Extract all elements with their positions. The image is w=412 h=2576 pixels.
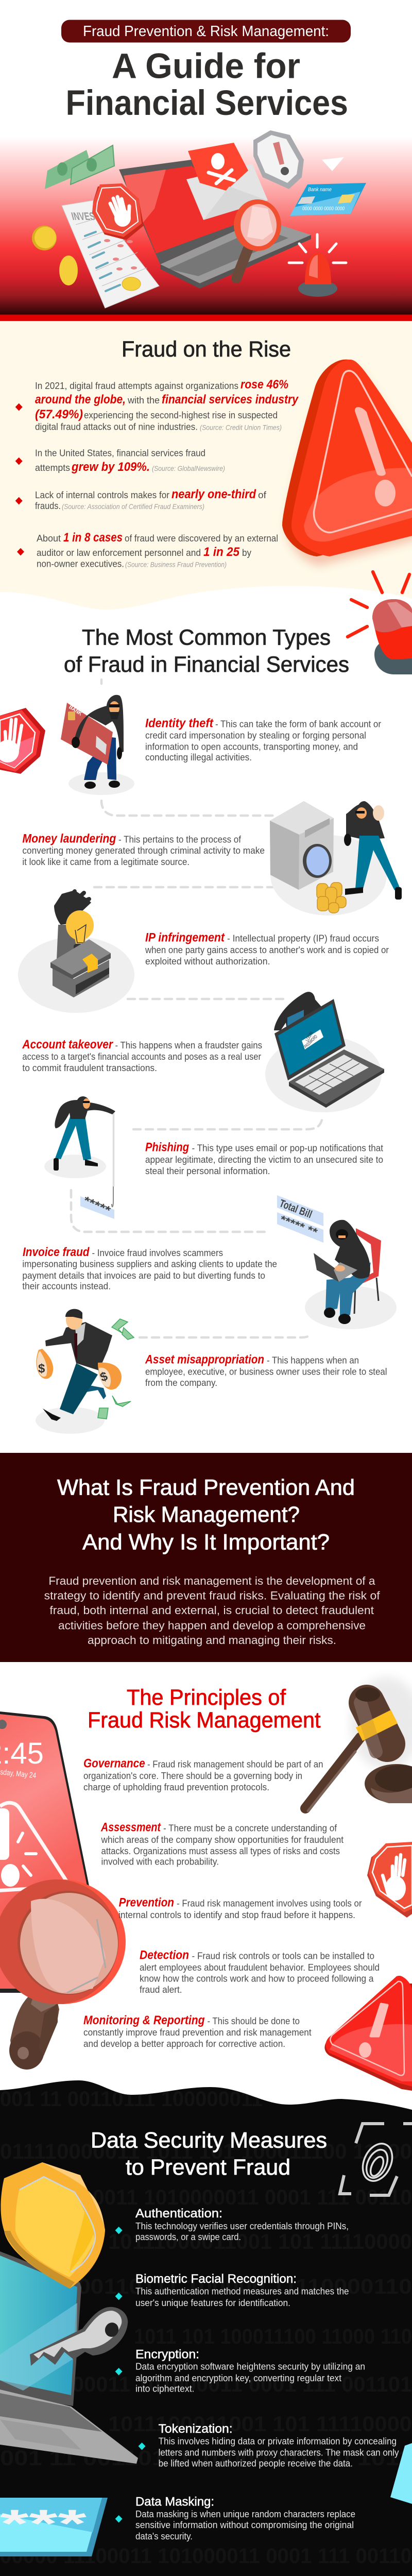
- skull and crossbones: [209, 153, 234, 183]
- body text: [44, 1574, 381, 1647]
- text: account takeover: access to a target's financial accounts and poses as a real user: [22, 1052, 261, 1062]
- icon: credit card: [290, 183, 366, 216]
- text: phishing: Phishing: [145, 1141, 189, 1155]
- text: phishing: - This type uses email or pop-up notifications that: [192, 1143, 383, 1154]
- heading: The Most Common Types: [82, 625, 331, 650]
- icon: account takeover laptop: [265, 992, 384, 1112]
- item: biometric: This authentication method measures and matches the: [135, 2286, 349, 2297]
- icon: warning triangle right: [324, 1976, 412, 2091]
- text: identity theft: information to open accounts, transporting money, and: [145, 742, 358, 752]
- icon: poison envelope: [186, 143, 268, 220]
- heading: Fraud Risk Management: [88, 1708, 321, 1733]
- text: invoice fraud: their accounts instead.: [22, 1281, 111, 1292]
- body text: activities before they happen and develop a comprehensive: [58, 1619, 366, 1632]
- bullet: digital fraud attempts: experiencing the second-highest rise in suspected: [84, 410, 278, 420]
- item: biometric: Biometric Facial Recognition:: [135, 2272, 297, 2286]
- body text: approach to mitigating and managing their risks.: [88, 1634, 336, 1647]
- text: phishing: steal their personal information.: [145, 1166, 270, 1176]
- body text: strategy to identify and prevent fraud risks. Evaluating the risk of: [44, 1589, 381, 1602]
- bullet: discovery cases: About: [37, 533, 61, 544]
- text: asset misappropriation: [145, 1353, 387, 1388]
- text: governance: organization's core. There should be a governing body in: [83, 1771, 302, 1781]
- bullet: united states growth: grew by 109%.: [71, 460, 150, 474]
- text: assessment: Assessment: [100, 1820, 161, 1834]
- heading: Risk Management?: [113, 1502, 300, 1527]
- bullet: discovery cases: 1 in 8 cases: [63, 531, 123, 545]
- icon: password card: ***: [0, 2502, 87, 2546]
- bullet: internal controls: frauds.: [35, 501, 61, 511]
- icon: account takeover laptop: LOGIN: [304, 1031, 314, 1042]
- item: data masking: Data masking is when unique random characters replace: [135, 2509, 355, 2519]
- icon: running man with money bags: $: [98, 1369, 110, 1385]
- text: monitoring and reporting: Monitoring & Reporting: [83, 2013, 205, 2027]
- item: tokenization: be lifted when authorized people receive the data.: [159, 2459, 353, 2469]
- text: prevention: [118, 1895, 362, 1920]
- text: asset misappropriation: from the company.: [145, 1378, 217, 1388]
- text: account takeover: [22, 1038, 262, 1073]
- icon: running man with money bags: $: [38, 1362, 45, 1376]
- text: asset misappropriation: - This happens when an: [267, 1355, 359, 1366]
- bullet: discovery cases: [17, 531, 278, 569]
- bullet: digital fraud attempts: (Source: Credit Union Times): [200, 423, 282, 432]
- text: ip infringement: [145, 931, 389, 967]
- bullet: digital fraud attempts: digital fraud attacks out of nine industries.: [35, 421, 198, 432]
- icon: invoice hacker on chair: Total Bill: [278, 1197, 314, 1221]
- text: money laundering: converting money generated through criminal activity to make: [22, 845, 265, 856]
- icon: paper plane: [322, 157, 344, 171]
- bullet: digital fraud attempts: In 2021, digital fraud attempts against organizations: [35, 381, 238, 391]
- bullet: digital fraud attempts: around the globe,: [35, 393, 126, 406]
- binary watermark: 011110000011 1011 101 100011100 11000: [0, 2139, 412, 2163]
- subtitle pill: Fraud Prevention & Risk Management:: [83, 23, 329, 40]
- icon: running man with money bags: [36, 1309, 134, 1434]
- item: encryption: [115, 2348, 365, 2394]
- panel: hero illustration: [0, 130, 412, 321]
- text: money laundering: Money laundering: [22, 832, 116, 846]
- item: tokenization: Tokenization:: [159, 2422, 233, 2436]
- text: detection: fraud alert.: [140, 1985, 182, 1995]
- bullet: internal controls: Lack of internal controls makes for: [35, 490, 169, 500]
- bullet: united states growth: In the United States, financial services fraud: [35, 448, 205, 458]
- item: data masking: Data Masking:: [135, 2495, 214, 2509]
- icon: hand stealing lightbulb from box: [18, 890, 134, 1013]
- text: account takeover: - This happens when a fraudster gains: [115, 1040, 262, 1050]
- bullet: discovery cases: auditor or law enforcement personnel and: [37, 548, 201, 558]
- text: governance: charge of upholding fraud prevention protocols.: [83, 1782, 269, 1792]
- text: governance: - Fraud risk management should be part of an: [147, 1759, 323, 1769]
- icon: stop sign right: [367, 1842, 412, 1918]
- text: money laundering: it look like it came from a legitimate source.: [22, 857, 190, 867]
- bullet: discovery cases: by: [242, 548, 251, 558]
- heading: The Principles of: [127, 1685, 286, 1710]
- icon: phone with alert: [0, 1711, 91, 1993]
- text: monitoring and reporting: [83, 2013, 312, 2049]
- text: prevention: Prevention: [119, 1895, 174, 1909]
- text: ip infringement: IP infringement: [145, 931, 225, 945]
- body text: Fraud prevention and risk management is the development of a: [48, 1574, 375, 1587]
- heading: [88, 1685, 321, 1733]
- text: money laundering: - This pertains to the process of: [118, 835, 242, 845]
- icon: credit card: 0000 0000 0000 0000: [302, 206, 345, 212]
- bullet: discovery cases: non-owner executives.: [37, 559, 124, 569]
- icon: banknotes: [45, 145, 114, 189]
- icon: coins: [32, 226, 78, 285]
- title: A Guide for: [112, 46, 300, 86]
- item: encryption: Encryption:: [135, 2348, 199, 2362]
- bullet: digital fraud attempts: (57.49%): [35, 408, 83, 421]
- text: invoice fraud: [22, 1245, 277, 1292]
- text: invoice fraud: Invoice fraud: [23, 1245, 90, 1259]
- icon: credit card: Bank name: [308, 187, 332, 193]
- text: prevention: internal controls to identify and stop fraud before it happens.: [118, 1910, 355, 1920]
- icon: report document: INVEST: [70, 210, 101, 223]
- icon: large magnifier: [0, 1879, 126, 2070]
- text: invoice fraud: - Invoice fraud involves scammers: [92, 1248, 223, 1258]
- heading: to Prevent Fraud: [126, 2155, 290, 2180]
- bullet: united states growth: [15, 448, 225, 474]
- item: tokenization: This involves hiding data or private information by concealing: [159, 2436, 397, 2447]
- text: detection: - Fraud risk controls or tools can be installed to: [192, 1951, 374, 1961]
- icon: red siren: [348, 572, 412, 674]
- panel: data security measures: [0, 2080, 412, 2576]
- panel: header: [61, 20, 351, 123]
- panel: principles of fraud risk management: [0, 1677, 412, 2091]
- heading: of Fraud in Financial Services: [64, 652, 349, 677]
- text: assessment: - There must be a concrete understanding of: [163, 1823, 337, 1833]
- icon: phishing thief: *****: [81, 1194, 113, 1217]
- icon: invoice hacker on chair: ***** **: [278, 1213, 319, 1239]
- icon: laptop with shield and key: [0, 2162, 138, 2464]
- text: identity theft: credit card impersonation by stealing or forging personal: [145, 731, 366, 741]
- text: phishing: [145, 1141, 383, 1176]
- text: monitoring and reporting: - This should be done to: [207, 2016, 300, 2026]
- icon: report document: [62, 200, 159, 308]
- item: authentication: This technology verifies user credentials through PINs,: [135, 2221, 349, 2231]
- panel: what is fraud prevention: [0, 1453, 412, 1662]
- icon: account takeover laptop: PASSWORD: [303, 1033, 318, 1049]
- text: ip infringement: when one party gains access to another's work and is copied or: [145, 945, 389, 955]
- heading: Fraud on the Rise: [122, 337, 291, 362]
- title: Financial Services: [66, 83, 348, 123]
- bullet: digital fraud attempts: financial services industry: [162, 393, 299, 406]
- bullet: united states growth: (Source: GlobalNewswire): [152, 464, 225, 472]
- binary watermark: 001 11 00110111 100000011: [0, 2087, 263, 2111]
- icon: identity thief with card: [61, 695, 134, 795]
- bullet: digital fraud attempts: rose 46%: [241, 378, 288, 392]
- text: monitoring and reporting: constantly improve fraud prevention and risk management: [83, 2027, 312, 2038]
- text: identity theft: conducting illegal activities.: [145, 752, 252, 762]
- bullet: discovery cases: of fraud were discovered by an external: [125, 533, 278, 544]
- key: [30, 2307, 128, 2366]
- item: encryption: into ciphertext.: [135, 2384, 195, 2394]
- bullet: internal controls: (Source: Association of Certified Fraud Examiners): [62, 502, 204, 511]
- icon: password card: [0, 2443, 412, 2556]
- bullet: united states growth: attempts: [35, 463, 70, 473]
- icon: fingerprint scanner: [340, 2124, 412, 2195]
- item: biometric: [115, 2272, 349, 2308]
- title: [66, 46, 348, 123]
- text: asset misappropriation: employee, executive, or business owner uses their role to steal: [145, 1367, 387, 1377]
- item: authentication: Authentication:: [135, 2207, 222, 2221]
- icon: laptop: [119, 160, 311, 289]
- text: account takeover: to commit fraudulent transactions.: [22, 1063, 157, 1073]
- text: ip infringement: exploited without authorization.: [145, 956, 270, 967]
- text: assessment: which areas of the company show opportunities for fraudulent: [101, 1835, 344, 1845]
- subtitle pill: [61, 20, 351, 42]
- text: prevention: - Fraud risk management involves using tools or: [177, 1898, 362, 1908]
- binary watermark: 1011100011001 101 11110000: [108, 2412, 412, 2436]
- text: invoice fraud: payment details that invoices are paid to but diverting funds to: [22, 1270, 265, 1281]
- binary watermark: 00110111 100000 11110000110: [77, 2274, 412, 2298]
- icon: phishing thief: [44, 1096, 115, 1219]
- item: data masking: [115, 2495, 355, 2541]
- text: ip infringement: - Intellectual property (IP) fraud occurs: [227, 934, 379, 944]
- item: encryption: algorithm and encryption key, converting regular text: [135, 2373, 341, 2383]
- bullet: internal controls: [15, 487, 267, 511]
- item: authentication: passwords, or a swipe card.: [135, 2232, 241, 2242]
- text: detection: alert employees about fraudulent behavior. Employees should: [140, 1962, 380, 1973]
- text: detection: [140, 1948, 380, 1995]
- text: identity theft: - This can take the form of bank account or: [215, 719, 381, 730]
- item: authentication: [115, 2207, 349, 2242]
- bullet: internal controls: of: [258, 490, 267, 500]
- heading: And Why Is It Important?: [82, 1530, 330, 1555]
- item: biometric: user's unique features for identification.: [135, 2298, 290, 2308]
- item: data masking: data's security.: [135, 2531, 193, 2541]
- text: phishing: appear legitimate, directing the victim to an unsecured site to: [145, 1155, 383, 1165]
- heading: [57, 1476, 355, 1555]
- text: account takeover: Account takeover: [22, 1038, 113, 1052]
- text: assessment: attacks. Organizations must assess all types of risks and costs: [101, 1846, 340, 1856]
- icon: stop sign left: [0, 708, 45, 774]
- text: assessment: involved with each probability.: [101, 1857, 219, 1867]
- dashed connectors: [71, 680, 322, 1337]
- icon: stop sign: [92, 183, 144, 240]
- icon: invoice hacker on chair: [277, 1195, 397, 1329]
- bullet: digital fraud attempts: [15, 378, 299, 432]
- text: detection: Detection: [140, 1948, 189, 1962]
- bullet: discovery cases: 1 in 25: [203, 545, 240, 559]
- icon: large warning triangle: [282, 360, 412, 566]
- text: monitoring and reporting: and develop a better approach for corrective action.: [83, 2039, 285, 2049]
- binary watermark: 001 11 00110111 10000001110 1011: [0, 2446, 412, 2470]
- heading: Data Security Measures: [91, 2128, 327, 2153]
- heading: [64, 625, 349, 677]
- binary watermark: 10111000011001 101 11110000: [108, 2229, 412, 2253]
- body text: fraud, both internal and external, is crucial to detect fraudulent: [49, 1604, 374, 1617]
- item: tokenization: letters and numbers with proxy characters. The mask can only: [159, 2448, 399, 2458]
- shield: [1, 2162, 105, 2289]
- text: asset misappropriation: Asset misappropriation: [145, 1353, 264, 1367]
- item: data masking: sensitive information without compromising the original: [135, 2520, 354, 2530]
- heading: What Is Fraud Prevention And: [57, 1476, 355, 1500]
- item: tokenization: [138, 2422, 399, 2469]
- text: assessment: [100, 1820, 344, 1867]
- bullet: internal controls: nearly one-third: [171, 487, 256, 501]
- panel: common types of fraud: [0, 572, 412, 1434]
- text: governance: [83, 1757, 323, 1792]
- item: encryption: Data encryption software heightens security by utilizing an: [135, 2362, 365, 2372]
- bullet: discovery cases: (Source: Business Fraud Prevention): [125, 561, 227, 569]
- bullet: digital fraud attempts: with the: [127, 395, 160, 405]
- icon: money laundering machine and thief: [270, 801, 402, 916]
- icon: siren: [289, 234, 346, 297]
- icon: phone with alert: sday, May 24: [0, 1768, 37, 1780]
- icon: magnifier: [234, 199, 281, 278]
- text: identity theft: Identity theft: [145, 717, 214, 731]
- binary watermark: [0, 2087, 412, 2576]
- text: money laundering: [22, 832, 265, 867]
- icon: warning shield: [253, 130, 304, 189]
- binary watermark: 00011 101000011 0001 111 001101: [72, 2372, 412, 2396]
- text: detection: know how the controls work and how to proceed following a: [140, 1973, 374, 1984]
- heading: [91, 2128, 327, 2180]
- panel: fraud on the rise: [0, 321, 412, 609]
- text: invoice fraud: impersonating business suppliers and asking clients to update the: [22, 1259, 277, 1269]
- text: identity theft: [145, 717, 381, 762]
- icon: judge gavel: [305, 1677, 412, 1811]
- icon: identity thief with card: BANK: [67, 704, 83, 717]
- text: governance: Governance: [83, 1757, 145, 1770]
